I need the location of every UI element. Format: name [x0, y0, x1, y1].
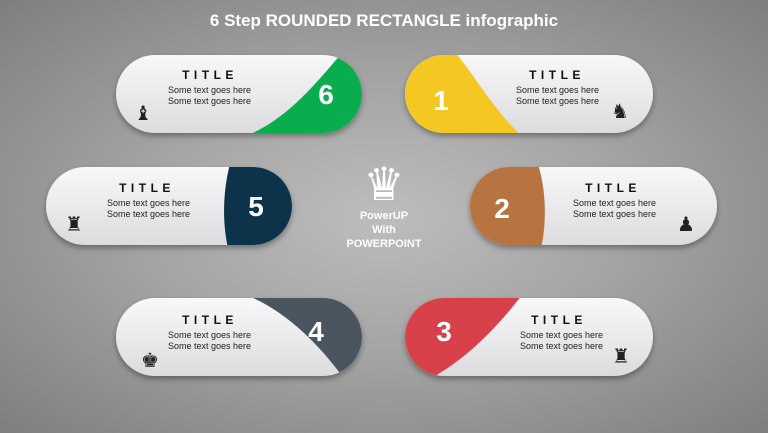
panel: step 5: [46, 164, 300, 248]
panel: step 3: Some text goes here: [520, 341, 603, 351]
panel: step 1: 1: [433, 85, 449, 116]
panel: step 1: Some text goes here: [516, 96, 599, 106]
panel: step 4: Some text goes here: [168, 341, 251, 351]
panel: step 3: TITLE: [531, 313, 587, 327]
panel: step 3: 3: [436, 316, 452, 347]
panel: step 4: Some text goes here: [168, 330, 251, 340]
panel: step 5: 5: [248, 191, 264, 222]
panel: step 1: ♞: [611, 99, 629, 123]
panel: step 5: Some text goes here: [107, 198, 190, 208]
panel: step 1: TITLE: [529, 68, 585, 82]
panel: step 2: Some text goes here: [573, 198, 656, 208]
panel: step 2: TITLE: [585, 181, 641, 195]
icon: crown logo: [346, 157, 422, 250]
panel: step 5: Some text goes here: [107, 209, 190, 219]
panel: step 5: ♜: [65, 212, 83, 236]
panel: step 1: Some text goes here: [516, 85, 599, 95]
panel: step 6: TITLE: [182, 68, 238, 82]
panel: step 3: [400, 295, 653, 380]
icon: crown logo: With: [372, 224, 396, 236]
panel: step 2: 2: [494, 193, 510, 224]
icon: crown logo: ♛: [363, 157, 405, 211]
panel: step 4: 4: [308, 316, 324, 347]
icon: crown logo: PowerUP: [360, 210, 408, 222]
panel: step 3: ♜: [612, 344, 630, 368]
panel: step 6: Some text goes here: [168, 96, 251, 106]
panel: step 4: TITLE: [182, 313, 238, 327]
panel: step 6: 6: [318, 79, 334, 110]
panel: step 1: [400, 52, 653, 136]
icon: crown logo: POWERPOINT: [346, 238, 422, 250]
panel: step 4: [116, 295, 370, 380]
panel: step 6: [116, 52, 370, 136]
panel: step 2: [465, 164, 717, 248]
title: 6 Step ROUNDED RECTANGLE infographic: [210, 11, 558, 30]
panel: step 4: ♚: [141, 348, 159, 372]
panel: step 3: Some text goes here: [520, 330, 603, 340]
panel: step 6: Some text goes here: [168, 85, 251, 95]
panel: step 2: Some text goes here: [573, 209, 656, 219]
panel: step 2: ♟: [677, 212, 695, 236]
panel: step 5: TITLE: [119, 181, 175, 195]
panel: step 6: ♝: [134, 101, 152, 125]
